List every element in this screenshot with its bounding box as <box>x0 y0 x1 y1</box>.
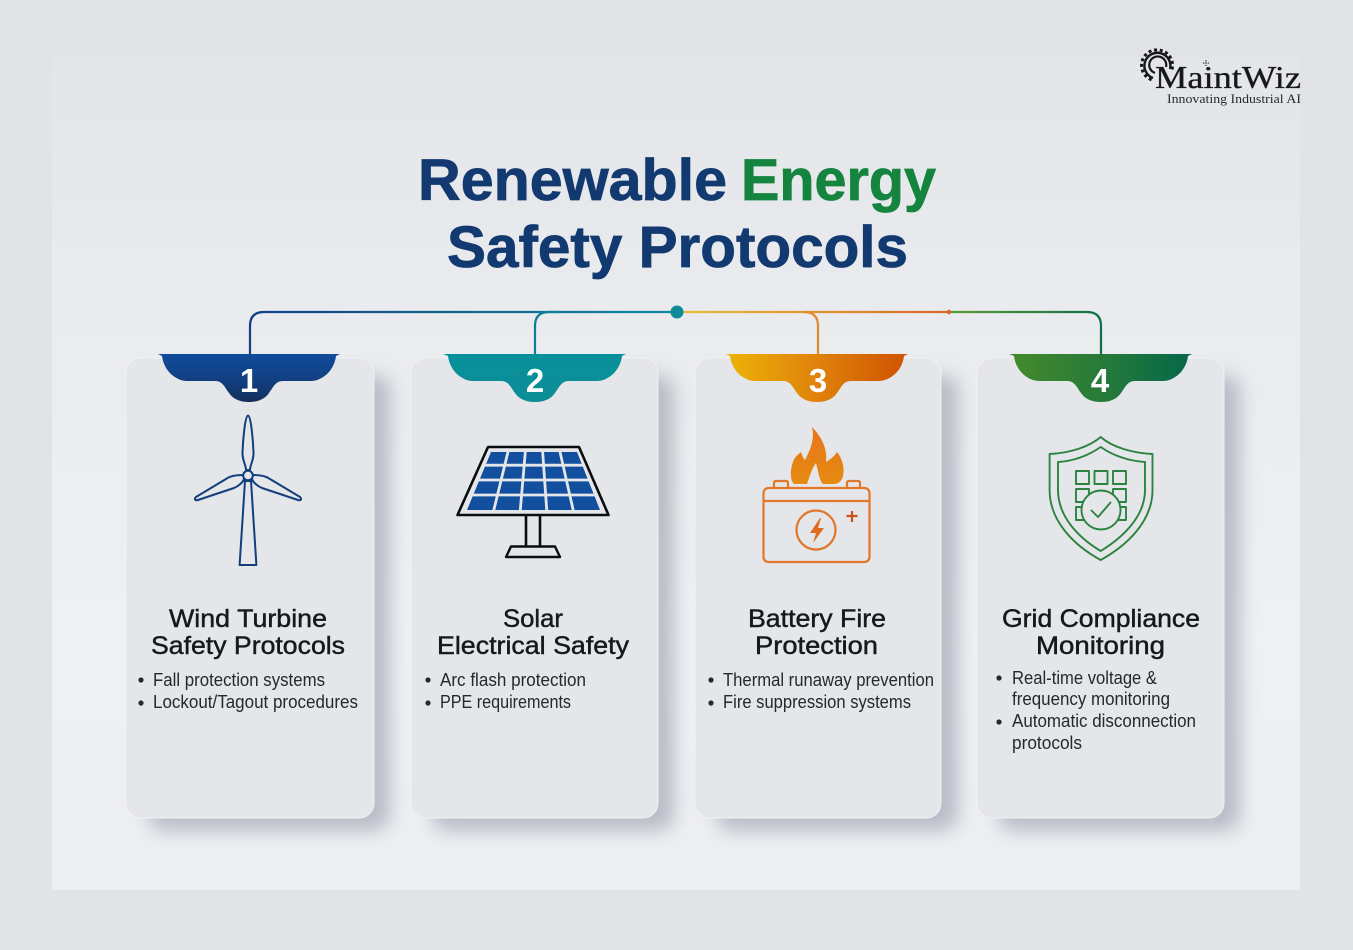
card 2 heading: Electrical Safety <box>437 632 630 660</box>
card 1 bullets: Fall protection systems <box>153 669 325 690</box>
connector junction <box>947 310 951 314</box>
connector lines <box>250 312 1101 356</box>
logo: MaintWiz <box>1142 50 1301 106</box>
panel: card 2 solar <box>411 354 658 818</box>
card 4 bullets: Real-time voltage & <box>1012 667 1158 688</box>
icon: shield <box>1050 437 1152 560</box>
connector node <box>670 306 684 318</box>
card 3 bullets <box>708 669 934 712</box>
title: Safety Protocols <box>447 215 908 280</box>
badge 4 <box>1009 354 1192 402</box>
card 4 heading <box>1002 605 1200 660</box>
logo sparkle <box>1203 60 1209 66</box>
card 4 heading: Monitoring <box>1036 632 1165 660</box>
logo: MaintWiz: Innovating Industrial AI <box>1167 92 1301 106</box>
card 3 heading <box>748 605 886 660</box>
card 1 bullets: Lockout/Tagout procedures <box>153 691 358 712</box>
badge 2 <box>443 354 626 402</box>
card 1 heading: Wind Turbine <box>169 605 327 633</box>
card shadows <box>148 375 1240 831</box>
card 4 bullets <box>996 667 1196 753</box>
card 4 bullets: frequency monitoring <box>1012 688 1170 709</box>
card 1 heading <box>151 605 345 660</box>
card 2 bullets: Arc flash protection <box>440 669 586 690</box>
card 4 heading: Grid Compliance <box>1002 605 1200 633</box>
badge 1: 1 <box>240 362 258 399</box>
panel: card 3 battery <box>695 354 941 818</box>
card 1 heading: Safety Protocols <box>151 632 345 660</box>
panel: card 4 grid <box>977 354 1224 818</box>
badge 3: 3 <box>809 362 827 399</box>
badge 2: 2 <box>526 362 544 399</box>
icon: solar panel <box>458 447 608 557</box>
card 4 bullets: Automatic disconnection <box>1012 710 1196 731</box>
card 2 bullets <box>425 669 586 712</box>
icon: gear <box>1142 50 1173 80</box>
card 3 bullets: Fire suppression systems <box>723 691 911 712</box>
badge 4: 4 <box>1091 362 1110 399</box>
title: Renewable <box>418 148 727 213</box>
card 2 heading: Solar <box>503 605 563 633</box>
badge 3 <box>726 354 908 402</box>
card 3 heading: Protection <box>755 632 878 660</box>
badge 1 <box>158 354 340 402</box>
panel: card 1 wind turbine <box>126 354 374 818</box>
card 2 bullets: PPE requirements <box>440 691 571 712</box>
card 3 bullets: Thermal runaway prevention <box>723 669 934 690</box>
title <box>418 148 936 280</box>
card 1 bullets <box>138 669 358 712</box>
icon: battery fire <box>764 427 870 562</box>
card 3 heading: Battery Fire <box>748 605 886 633</box>
card 2 heading <box>437 605 630 660</box>
icon: wind turbine <box>195 416 301 565</box>
title: Energy <box>741 148 936 213</box>
card 4 bullets: protocols <box>1012 732 1082 753</box>
logo: MaintWiz: MaintWiz <box>1155 59 1301 95</box>
